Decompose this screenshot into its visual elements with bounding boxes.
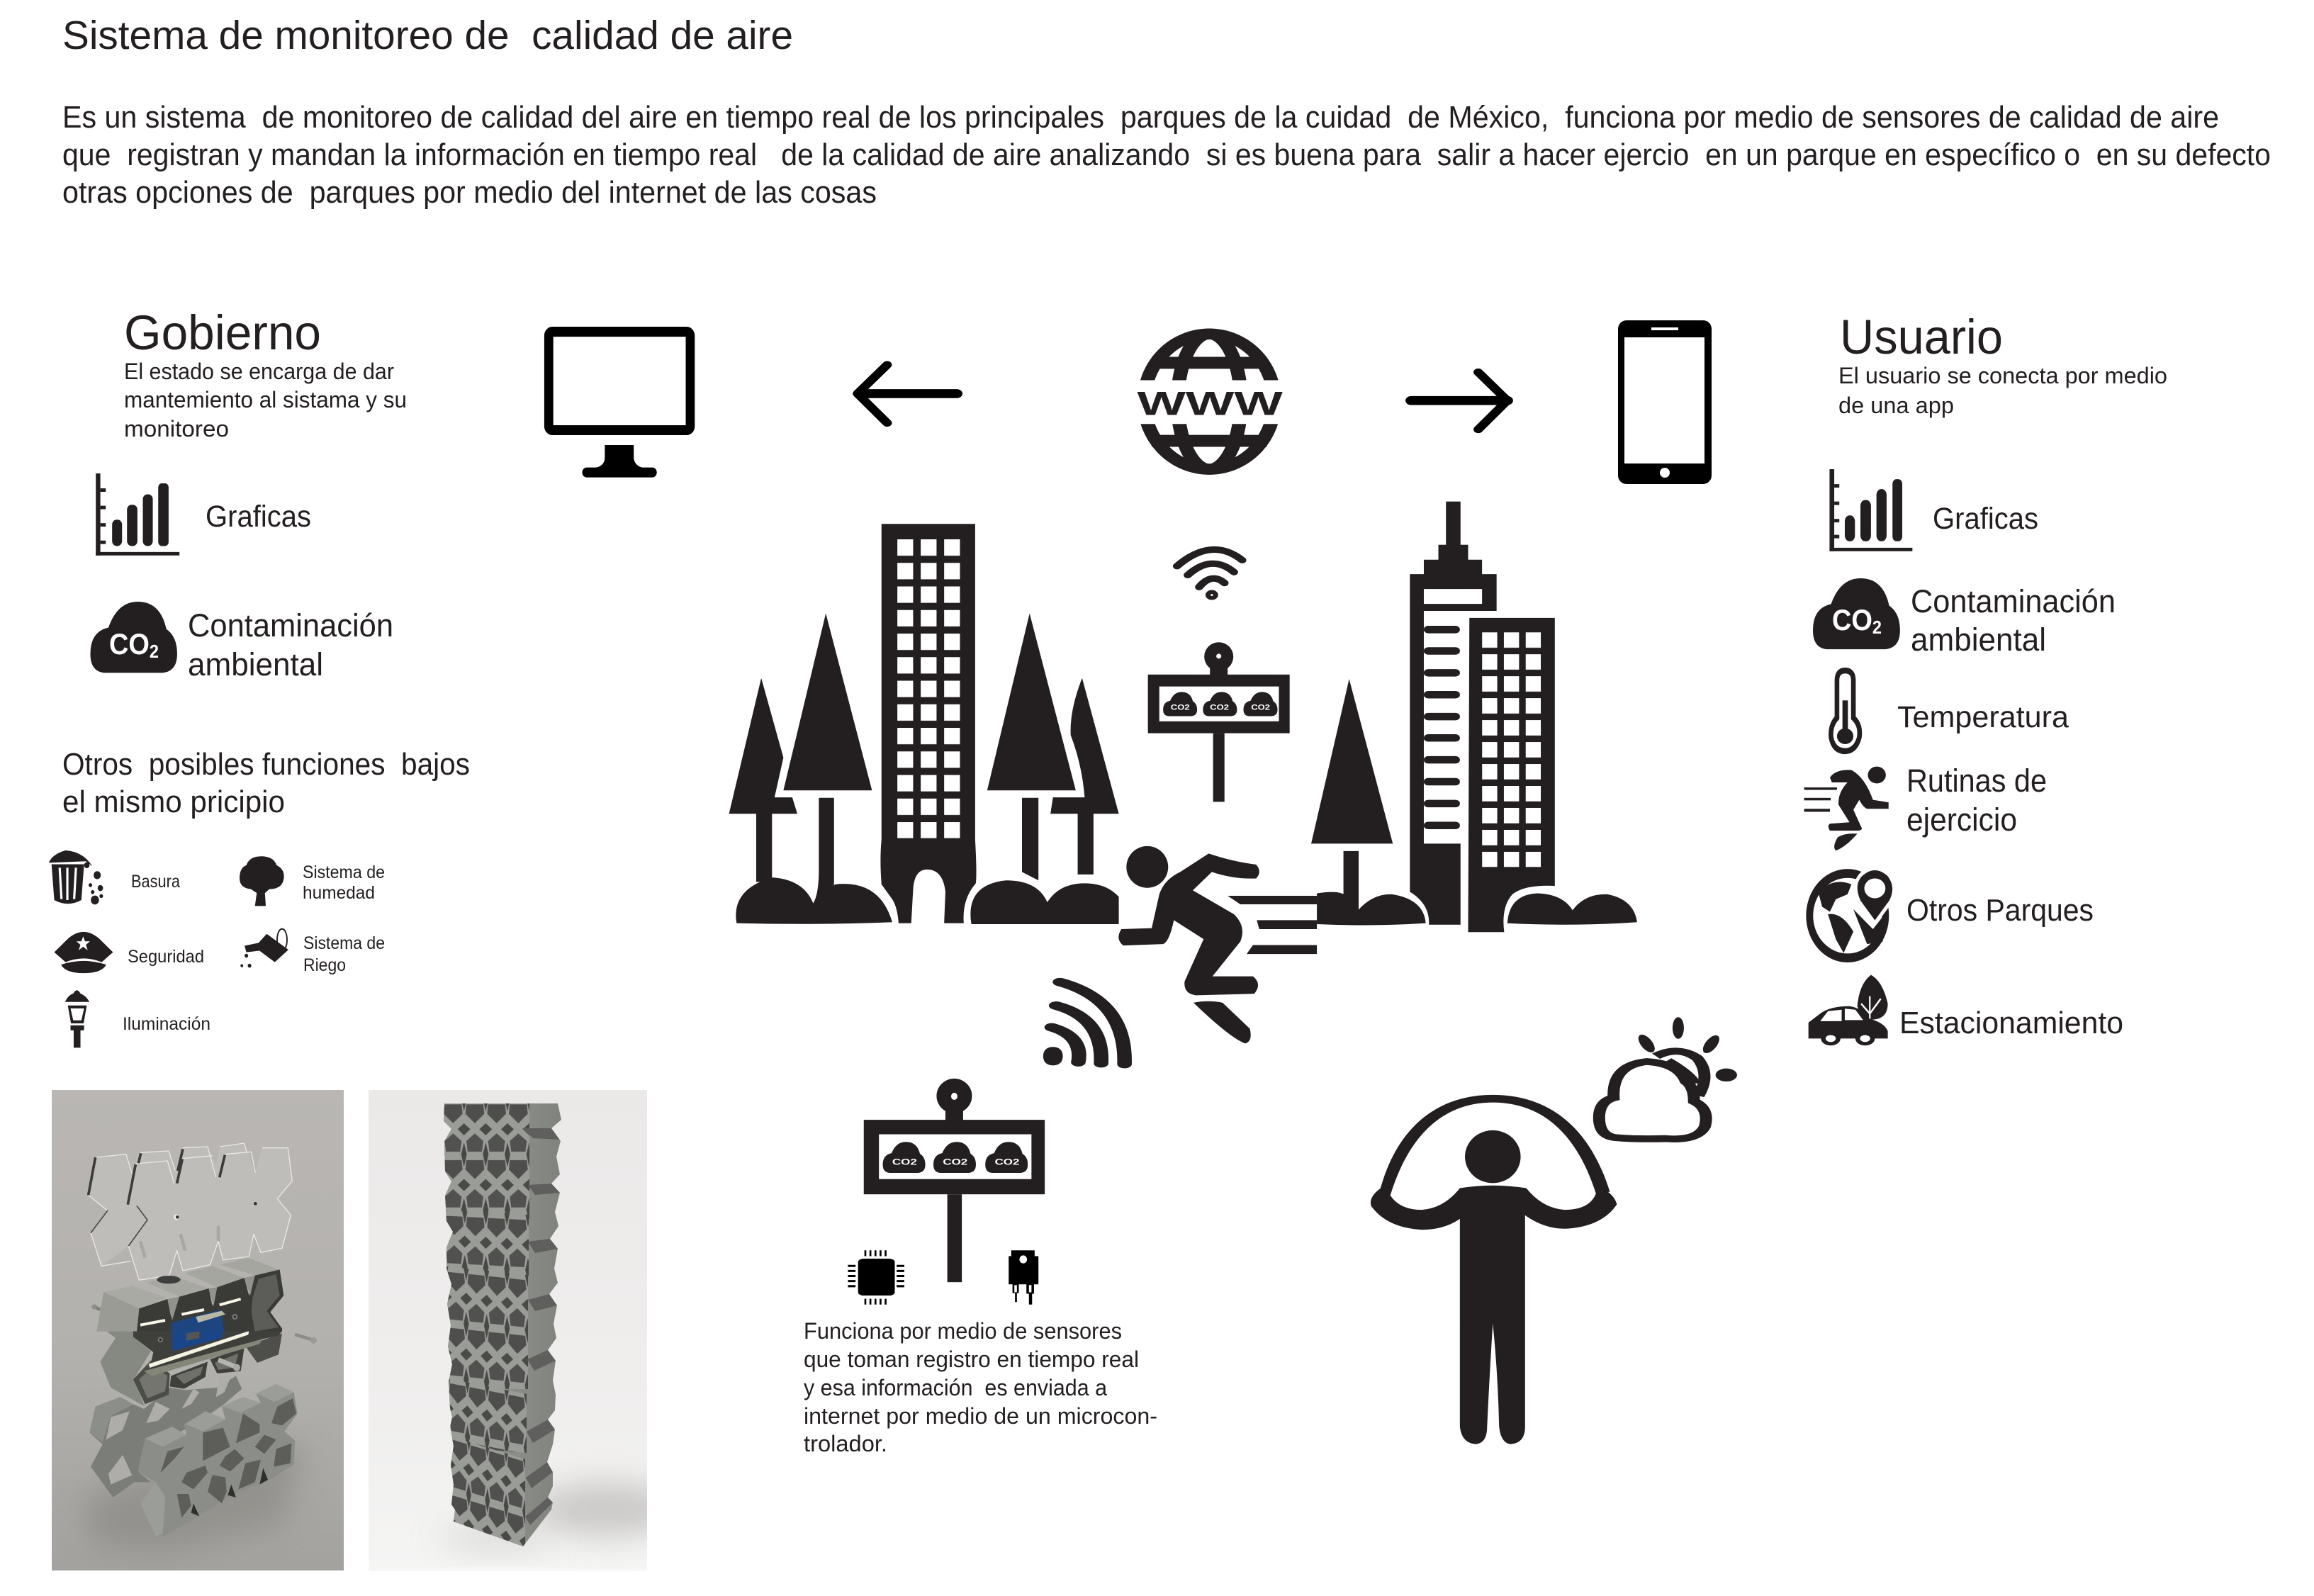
icon: bar chart xyxy=(1829,469,1912,551)
shadow xyxy=(532,1483,680,1536)
runner xyxy=(1118,846,1259,1043)
intro paragraph: Es un sistema de monitoreo de calidad del aire en tiempo real de los principales parques de la cuidad de México, funciona por medio de sensores de calidad de aire xyxy=(62,100,2219,135)
gobierno description: monitoreo xyxy=(124,416,229,442)
sensor description: internet por medio de un microcon- xyxy=(804,1403,1157,1429)
icon: globe with pin xyxy=(1809,868,1894,958)
label: Otros Parques: Otros Parques xyxy=(1906,893,2094,928)
label: Graficas: Graficas xyxy=(206,500,311,534)
label: Sistema de humedad: Sistema de xyxy=(303,862,385,882)
panel: otras funciones xyxy=(49,747,470,1047)
icon: runner xyxy=(1804,767,1889,850)
icon: CO2 cloud xyxy=(91,602,177,673)
heading: Usuario: Usuario xyxy=(1840,310,2003,364)
upper block top part xyxy=(91,1258,283,1332)
heading: otras funciones xyxy=(62,747,470,819)
label: Seguridad: Seguridad xyxy=(128,947,204,967)
heading: otras funciones: Otros posibles funciones bajos xyxy=(62,747,470,782)
heading: Gobierno: Gobierno xyxy=(124,305,321,360)
label: Sistema de Riego: Sistema de xyxy=(303,933,385,953)
icon: wifi small xyxy=(1177,549,1242,598)
label: Sistema de humedad: humedad xyxy=(303,883,375,903)
sensor description: que toman registro en tiempo real xyxy=(804,1347,1139,1372)
gobierno description xyxy=(124,359,407,442)
icon: CO2 cloud: 2 xyxy=(150,641,159,662)
icon: car with tree xyxy=(1809,975,1888,1045)
usuario description: El usuario se conecta por medio xyxy=(1838,363,2167,388)
arrow: right xyxy=(1411,372,1507,429)
heading: otras funciones: el mismo pricipio xyxy=(62,785,285,819)
sensor sign small: CO2 xyxy=(1251,702,1270,712)
label: Contaminacion ambiental: Contaminación xyxy=(188,607,393,644)
intro paragraph: otras opciones de parques por medio del internet de las cosas xyxy=(62,175,877,210)
icon: CO2 cloud: CO xyxy=(109,627,154,661)
icon: cloud and sun xyxy=(1599,1017,1737,1139)
sensor sign large: CO2 xyxy=(892,1157,917,1167)
label: Temperatura: Temperatura xyxy=(1897,700,2069,734)
sensor sign large: CO2 xyxy=(943,1157,967,1167)
person holding dome xyxy=(1371,1095,1617,1444)
label: Sistema de Riego xyxy=(303,933,385,975)
usuario description: de una app xyxy=(1838,393,1954,418)
label: Contaminacion ambiental: ambiental xyxy=(1911,622,2046,658)
sensor sign large: CO2 xyxy=(995,1157,1019,1167)
sensor sign small: CO2 xyxy=(1171,702,1190,712)
photo: exploded concrete module xyxy=(52,1090,344,1570)
icon: police cap xyxy=(55,932,113,973)
side face shading xyxy=(522,1128,560,1525)
icon: monitor xyxy=(549,332,690,478)
icon: bar chart xyxy=(96,473,179,556)
sensor sign small xyxy=(1148,642,1290,802)
label: Rutinas de ejercicio xyxy=(1906,763,2047,838)
label: Sistema de Riego: Riego xyxy=(303,955,346,975)
gobierno description: mantemiento al sistama y su xyxy=(124,387,407,412)
label: Contaminacion ambiental: ambiental xyxy=(188,646,323,682)
arrow: left xyxy=(858,365,957,423)
icon: thermometer xyxy=(1831,670,1860,751)
icon: street lamp xyxy=(65,990,89,1047)
icon: smartphone xyxy=(1618,320,1712,484)
photo: concrete tower xyxy=(369,1090,647,1570)
sensor description: Funciona por medio de sensores xyxy=(804,1318,1122,1344)
sensor description xyxy=(804,1318,1157,1456)
icon: trash can xyxy=(49,850,103,904)
city illustration xyxy=(729,502,1637,1043)
label: Sistema de humedad xyxy=(303,862,385,903)
label: Estacionamiento: Estacionamiento xyxy=(1899,1006,2123,1040)
label: Basura: Basura xyxy=(131,872,180,892)
title: Sistema de monitoreo de calidad de aire xyxy=(62,13,793,58)
label: Rutinas de ejercicio: Rutinas de xyxy=(1906,763,2047,799)
icon: watering can xyxy=(240,929,288,967)
upper block lower part xyxy=(100,1331,317,1406)
intro paragraph xyxy=(62,100,2271,210)
back lattice block xyxy=(89,1376,242,1497)
icon: CO2 cloud: 2 xyxy=(1872,617,1882,638)
label: Contaminacion ambiental xyxy=(1911,583,2116,658)
panel: usuario xyxy=(1804,310,2167,1045)
floor shadow xyxy=(85,1446,305,1552)
sensor description: trolador. xyxy=(804,1431,887,1456)
gobierno description: El estado se encarga de dar xyxy=(124,359,394,384)
skyscraper xyxy=(1410,502,1497,925)
icon: www globe: WWW xyxy=(1137,385,1283,422)
front lattice block xyxy=(138,1384,298,1536)
label: Iluminacion: Iluminación xyxy=(123,1014,210,1034)
icon: wifi large xyxy=(1050,982,1125,1064)
trees xyxy=(729,614,1393,914)
icon: tree xyxy=(240,856,284,906)
label: Contaminacion ambiental: Contaminación xyxy=(1911,583,2116,619)
panel: gobierno xyxy=(91,305,407,682)
building left xyxy=(880,524,977,923)
tower body xyxy=(439,1098,567,1552)
building right xyxy=(1468,618,1555,932)
usuario description xyxy=(1838,363,2167,418)
icon: CO2 cloud: CO xyxy=(1832,603,1877,636)
icon: microchip xyxy=(852,1253,901,1302)
label: Rutinas de ejercicio: ejercicio xyxy=(1906,802,2017,838)
icon: www globe xyxy=(1137,334,1283,469)
icon: transistor xyxy=(1009,1250,1038,1305)
bushes xyxy=(736,877,1637,925)
speed lines xyxy=(1228,896,1317,954)
label: Graficas: Graficas xyxy=(1933,502,2038,536)
sensor sign small: CO2 xyxy=(1210,702,1229,712)
sensor description: y esa información es enviada a xyxy=(804,1375,1107,1400)
icon: CO2 cloud xyxy=(1813,578,1900,649)
sensor sign large xyxy=(864,1079,1045,1282)
acrylic sheets xyxy=(89,1143,292,1280)
label: Contaminacion ambiental xyxy=(188,607,393,682)
